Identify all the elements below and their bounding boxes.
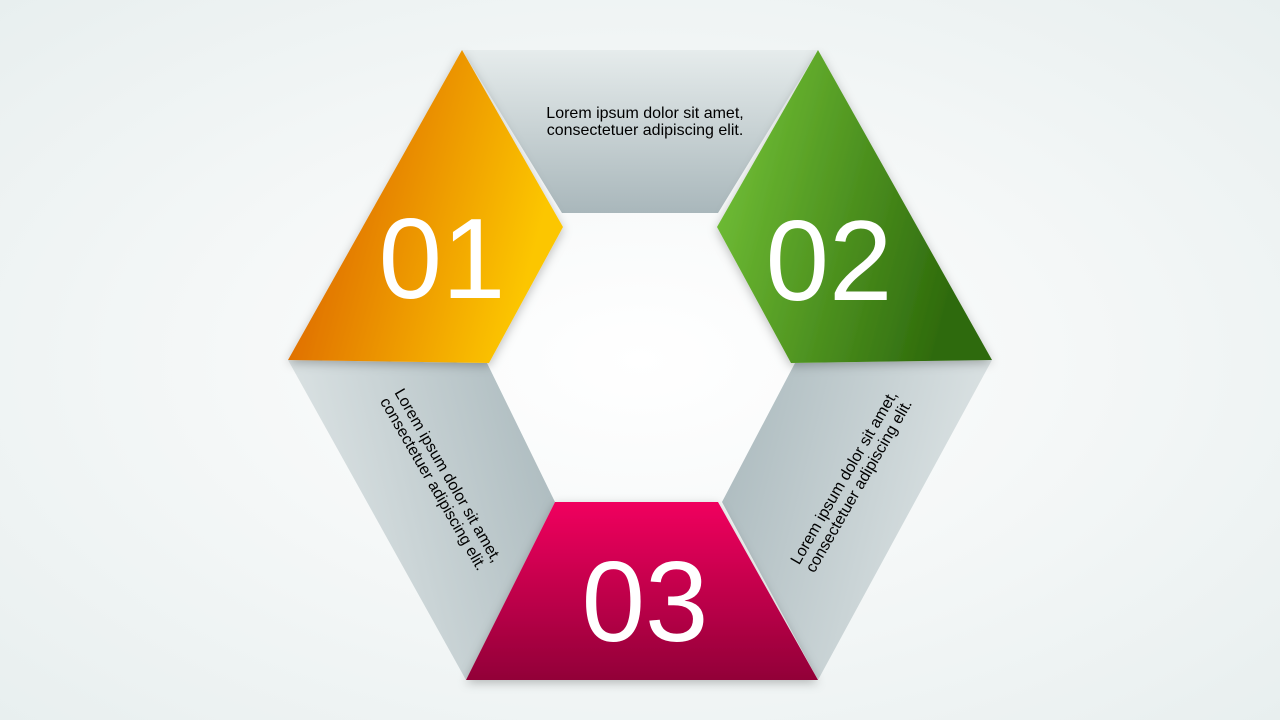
panel: lower-left gray band: Lorem ipsum dolor sit amet,: [391, 386, 504, 565]
panel: top gray band: Lorem ipsum dolor sit amet,: [546, 105, 744, 122]
panel: 01 orange: 01: [379, 196, 505, 323]
panel: 03 pink: 03: [582, 539, 708, 666]
panel: top gray band: consectetuer adipiscing elit.: [547, 122, 743, 139]
panel: lower-left gray band: [288, 360, 555, 680]
panel: lower-right gray band: consectetuer adipiscing elit.: [803, 397, 916, 576]
panel: lower-right gray band: [722, 360, 992, 680]
panel: 03 pink: [466, 502, 818, 680]
panel: lower-left gray band: consectetuer adipiscing elit.: [376, 395, 489, 574]
panel: 01 orange: [288, 50, 563, 363]
panel: 02 green: 02: [766, 198, 892, 325]
panel: lower-right gray band: Lorem ipsum dolor sit amet,: [788, 388, 901, 567]
panel: top gray band: [462, 50, 818, 213]
panel: 02 green: [717, 50, 992, 363]
